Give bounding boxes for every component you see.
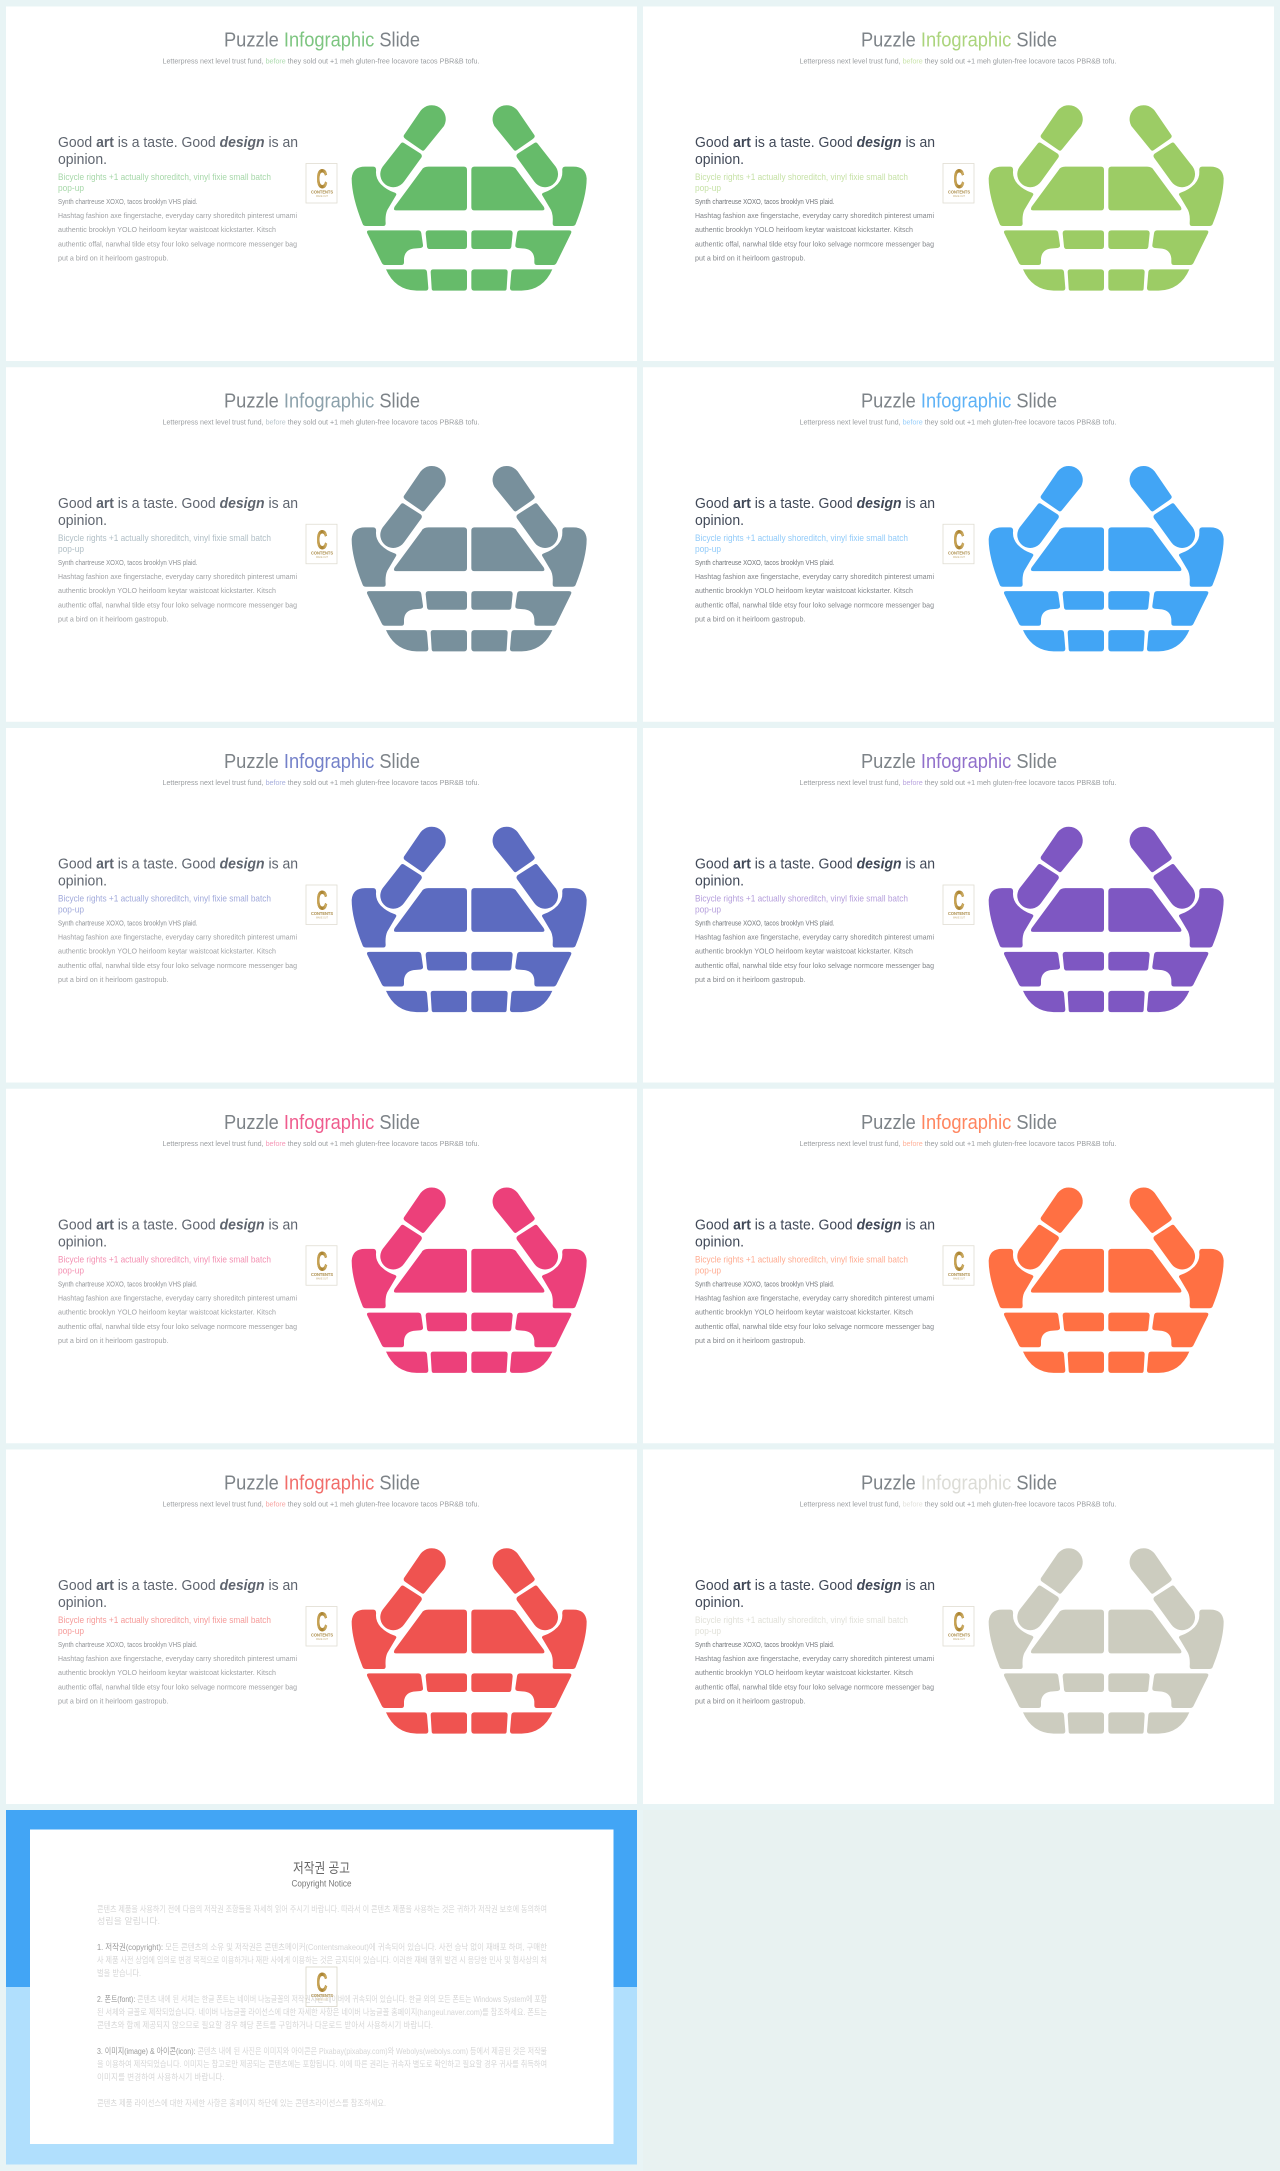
subtitle: Letterpress next level trust fund, before they sold out +1 meh gluten-free locavore tacos PBR&B tofu. — [162, 1139, 480, 1148]
panel: light green slide — [643, 6, 1274, 361]
small text: Synth chartreuse XOXO, tacos brooklyn VHS plaid. — [58, 920, 198, 928]
panel: green slide — [6, 6, 637, 361]
body text: put a bird on it heirloom gastropub. — [695, 1336, 806, 1345]
body text: authentic offal, narwhal tilde etsy four loko selvage normcore messenger bag — [58, 961, 297, 970]
text block: font clause — [97, 1994, 547, 2030]
heading: Good art is a taste. Good design is an — [695, 1578, 935, 1594]
text block: image clause: 3. 이미지(image) & 아이콘(icon): 콘텐츠 내에 된 사진은 이미지와 아이콘은 Pixabay(pixabay.com)와 Webolys(webolys.com) 등에서 제공된 것은 저작물 — [97, 2046, 547, 2056]
body text: Hashtag fashion axe fingerstache, everyday carry shoreditch pinterest umami — [58, 1654, 297, 1663]
logo: contents: C — [316, 1246, 328, 1276]
subtitle: Letterpress next level trust fund, before they sold out +1 meh gluten-free locavore tacos PBR&B tofu. — [800, 1500, 1116, 1508]
logo: contents — [943, 1606, 974, 1646]
heading second line: opinion. — [58, 1595, 107, 1611]
icon: puzzle basket — [989, 1548, 1224, 1734]
sub heading: Bicycle rights +1 actually shoreditch, vinyl fixie small batch — [695, 171, 908, 182]
logo: contents — [306, 164, 337, 203]
body text: Hashtag fashion axe fingerstache, everyday carry shoreditch pinterest umami — [58, 932, 297, 942]
logo: contents: CONTENTS — [948, 550, 970, 555]
body text: authentic brooklyn YOLO heirloom keytar waistcoat kickstarter. Kitsch — [58, 225, 276, 234]
panel: copyright notice — [6, 1810, 637, 2164]
panel: blue slide — [643, 367, 1274, 722]
body text: authentic offal, narwhal tilde etsy four loko selvage normcore messenger bag — [58, 240, 297, 248]
body text — [58, 932, 297, 984]
title: Puzzle Infographic Slide — [224, 1472, 420, 1494]
body text: authentic brooklyn YOLO heirloom keytar waistcoat kickstarter. Kitsch — [695, 225, 913, 234]
icon: puzzle basket — [352, 105, 587, 291]
sub heading second line: pop-up — [695, 1625, 721, 1636]
text block: license note: 콘텐츠 제품 라이선스에 대한 자세한 사항은 홈페이지 하단에 있는 콘텐츠라이선스를 참조하세요. — [97, 2098, 386, 2108]
subtitle: Letterpress next level trust fund, before they sold out +1 meh gluten-free locavore tacos PBR&B tofu. — [800, 778, 1116, 787]
sub heading second line: pop-up — [58, 904, 84, 914]
logo: contents — [306, 524, 337, 564]
logo: contents: CONTENTS — [311, 1632, 333, 1638]
logo: contents: CONTENTS — [311, 550, 333, 555]
logo: contents — [943, 1246, 974, 1285]
logo: contents — [306, 1606, 337, 1646]
sub heading second line: pop-up — [695, 543, 721, 554]
text block: intro: 성립을 알립니다. — [97, 1916, 160, 1926]
text block: copyright clause: 벌을 받습니다. — [97, 1968, 141, 1978]
sub heading second line: pop-up — [58, 543, 84, 554]
body text: Hashtag fashion axe fingerstache, everyday carry shoreditch pinterest umami — [58, 211, 297, 220]
logo: contents — [306, 1246, 337, 1285]
body text: put a bird on it heirloom gastropub. — [58, 1336, 168, 1345]
text block: font clause: 콘텐츠와 함께 제공되지 않으므로 필요할 경우 해당 폰트를 구입하거나 다운로드 받아서 사용하시기 바랍니다. — [97, 2020, 433, 2030]
logo: contents: MAKE OUT — [316, 1276, 328, 1280]
title: Puzzle Infographic Slide — [861, 1112, 1057, 1134]
logo: contents: C — [316, 1968, 328, 1998]
title: Puzzle Infographic Slide — [224, 1112, 420, 1134]
logo: contents: MAKE OUT — [316, 1637, 328, 1641]
heading: Good art is a taste. Good design is an — [695, 1217, 935, 1233]
body text — [58, 572, 297, 623]
body text: authentic offal, narwhal tilde etsy four loko selvage normcore messenger bag — [58, 1322, 297, 1331]
body text: authentic brooklyn YOLO heirloom keytar waistcoat kickstarter. Kitsch — [695, 1307, 913, 1316]
body text: authentic offal, narwhal tilde etsy four loko selvage normcore messenger bag — [695, 1682, 934, 1692]
sub heading second line: pop-up — [58, 182, 84, 193]
logo: contents — [943, 885, 974, 924]
sub heading: Bicycle rights +1 actually shoreditch, vinyl fixie small batch — [695, 1253, 908, 1264]
title: Puzzle Infographic Slide — [224, 751, 420, 773]
body text: put a bird on it heirloom gastropub. — [695, 975, 806, 984]
icon: puzzle basket — [352, 827, 587, 1012]
heading: Good art is a taste. Good design is an — [695, 496, 935, 512]
sub heading second line: pop-up — [695, 182, 721, 193]
logo: contents: CONTENTS — [311, 1993, 333, 1998]
logo: contents — [943, 164, 974, 203]
body text: authentic brooklyn YOLO heirloom keytar waistcoat kickstarter. Kitsch — [695, 1668, 913, 1677]
body text: authentic brooklyn YOLO heirloom keytar waistcoat kickstarter. Kitsch — [58, 1668, 276, 1677]
logo: contents: CONTENTS — [311, 911, 333, 916]
logo: contents — [943, 524, 974, 564]
text block: image clause: 을 이용하여 제작되었습니다. 이미지는 참고로만 제공되는 콘텐츠에는 포함됩니다. 이에 따른 권리는 귀속자 별도로 확인하고 필요할 경우 귀사를 취득하여 — [97, 2059, 547, 2069]
panel: orange slide — [643, 1089, 1274, 1443]
body text: Hashtag fashion axe fingerstache, everyday carry shoreditch pinterest umami — [695, 1654, 934, 1663]
subtitle: Letterpress next level trust fund, before they sold out +1 meh gluten-free locavore tacos PBR&B tofu. — [162, 56, 480, 66]
icon: puzzle basket — [989, 827, 1224, 1012]
body text: authentic brooklyn YOLO heirloom keytar waistcoat kickstarter. Kitsch — [695, 586, 913, 595]
sub heading: Bicycle rights +1 actually shoreditch, vinyl fixie small batch — [695, 1614, 908, 1625]
logo: contents: MAKE OUT — [953, 916, 965, 920]
sub heading: Bicycle rights +1 actually shoreditch, vinyl fixie small batch — [58, 1253, 271, 1264]
heading: Good art is a taste. Good design is an — [695, 856, 935, 872]
title: Puzzle Infographic Slide — [224, 390, 420, 412]
body text: put a bird on it heirloom gastropub. — [695, 1696, 806, 1706]
title: Puzzle Infographic Slide — [224, 30, 420, 52]
sub heading second line: pop-up — [695, 1264, 721, 1275]
body text: Hashtag fashion axe fingerstache, everyday carry shoreditch pinterest umami — [695, 1293, 934, 1302]
text block: copyright clause — [97, 1942, 547, 1978]
heading second line: opinion. — [58, 1234, 107, 1250]
heading: Good art is a taste. Good design is an — [695, 135, 935, 151]
icon: puzzle basket — [352, 1548, 587, 1734]
body text: authentic offal, narwhal tilde etsy four loko selvage normcore messenger bag — [695, 240, 934, 248]
heading second line: opinion. — [695, 1595, 744, 1611]
heading: Good art is a taste. Good design is an — [58, 135, 298, 151]
heading second line: opinion. — [695, 513, 744, 529]
heading: Good art is a taste. Good design is an — [58, 496, 298, 512]
body text: authentic offal, narwhal tilde etsy four loko selvage normcore messenger bag — [58, 600, 297, 609]
logo: contents — [306, 885, 337, 924]
logo: contents: C — [316, 164, 328, 194]
logo: contents: CONTENTS — [948, 190, 970, 194]
logo: contents: C — [954, 525, 964, 555]
heading: copyright notice English: Copyright Notice — [292, 1878, 352, 1888]
sub heading: Bicycle rights +1 actually shoreditch, vinyl fixie small batch — [58, 892, 271, 904]
body text — [58, 211, 297, 262]
body text — [695, 572, 934, 623]
body text: Hashtag fashion axe fingerstache, everyday carry shoreditch pinterest umami — [58, 572, 297, 581]
body text — [695, 1654, 934, 1706]
text block: font clause: 2. 폰트(font): 콘텐츠 내에 된 서체는 한글 폰트는 네이버 나눔글꼴의 저작권자인 네이버에 귀속되어 있습니다. 한글 외의 모든 폰트는 Windows System에 포함 — [97, 1994, 547, 2004]
body text: Hashtag fashion axe fingerstache, everyday carry shoreditch pinterest umami — [58, 1293, 297, 1302]
sub heading: Bicycle rights +1 actually shoreditch, vinyl fixie small batch — [58, 171, 271, 182]
body text: put a bird on it heirloom gastropub. — [58, 1696, 168, 1706]
panel: blue grey slide — [6, 367, 637, 722]
body text: authentic brooklyn YOLO heirloom keytar waistcoat kickstarter. Kitsch — [695, 946, 913, 956]
body text: Hashtag fashion axe fingerstache, everyday carry shoreditch pinterest umami — [695, 572, 934, 581]
body text: put a bird on it heirloom gastropub. — [58, 614, 168, 623]
title: Puzzle Infographic Slide — [861, 30, 1057, 52]
small text: Synth chartreuse XOXO, tacos brooklyn VHS plaid. — [58, 199, 198, 206]
heading: copyright notice Korean: 저작권 공고 — [293, 1860, 350, 1876]
sub heading: Bicycle rights +1 actually shoreditch, vinyl fixie small batch — [58, 1614, 271, 1625]
logo: contents — [306, 1967, 337, 2006]
small text: Synth chartreuse XOXO, tacos brooklyn VHS plaid. — [58, 1281, 198, 1288]
sub heading second line: pop-up — [695, 904, 721, 914]
logo: contents: C — [954, 164, 964, 194]
panel: grey slide — [643, 1450, 1274, 1804]
heading: Good art is a taste. Good design is an — [58, 1578, 298, 1594]
title: Puzzle Infographic Slide — [861, 1472, 1057, 1494]
small text: Synth chartreuse XOXO, tacos brooklyn VHS plaid. — [695, 920, 835, 928]
subtitle: Letterpress next level trust fund, before they sold out +1 meh gluten-free locavore tacos PBR&B tofu. — [800, 1139, 1116, 1148]
logo: contents: MAKE OUT — [953, 555, 965, 559]
subtitle: Letterpress next level trust fund, before they sold out +1 meh gluten-free locavore tacos PBR&B tofu. — [800, 56, 1116, 66]
sub heading second line: pop-up — [58, 1264, 84, 1275]
body text: Hashtag fashion axe fingerstache, everyday carry shoreditch pinterest umami — [695, 932, 934, 942]
icon: puzzle basket — [989, 1187, 1224, 1373]
small text: Synth chartreuse XOXO, tacos brooklyn VHS plaid. — [695, 199, 835, 206]
heading second line: opinion. — [695, 874, 744, 890]
body text — [695, 211, 934, 262]
subtitle: Letterpress next level trust fund, before they sold out +1 meh gluten-free locavore tacos PBR&B tofu. — [800, 417, 1116, 426]
heading second line: opinion. — [58, 152, 107, 168]
panel: pink slide — [6, 1089, 637, 1443]
text block: intro: 콘텐츠 제품을 사용하기 전에 다음의 저작권 조항들을 자세히 읽어 주시기 바랍니다. 따라서 이 콘텐츠 제품을 사용하는 것은 귀하가 저작권 보호에 동의하여 — [97, 1904, 547, 1914]
sub heading: Bicycle rights +1 actually shoreditch, vinyl fixie small batch — [58, 532, 271, 543]
logo: contents: C — [316, 525, 328, 555]
body text: put a bird on it heirloom gastropub. — [58, 975, 168, 984]
logo: contents: MAKE OUT — [953, 1276, 965, 1280]
logo: contents: C — [954, 1607, 964, 1637]
logo: contents: CONTENTS — [948, 911, 970, 916]
small text: Synth chartreuse XOXO, tacos brooklyn VHS plaid. — [58, 560, 198, 567]
small text: Synth chartreuse XOXO, tacos brooklyn VHS plaid. — [695, 1642, 835, 1649]
body text: authentic offal, narwhal tilde etsy four loko selvage normcore messenger bag — [695, 1322, 934, 1331]
body text: authentic offal, narwhal tilde etsy four loko selvage normcore messenger bag — [695, 961, 934, 970]
logo: contents: C — [316, 1607, 328, 1637]
body text: put a bird on it heirloom gastropub. — [695, 614, 806, 623]
title: Puzzle Infographic Slide — [861, 390, 1057, 412]
body text — [695, 932, 934, 984]
icon: puzzle basket — [352, 1187, 587, 1373]
title: Puzzle Infographic Slide — [861, 751, 1057, 773]
text block: font clause: 된 서체와 글꼴로 제작되었습니다. 네이버 나눔글꼴 라이선스에 대한 자세한 사항은 네이버 나눔글꼴 홈페이지(hangeul.naver.com)를 참조하세요. 폰트는 — [97, 2007, 547, 2017]
body text: put a bird on it heirloom gastropub. — [695, 254, 806, 262]
logo: contents: MAKE OUT — [316, 1998, 328, 2002]
panel: purple slide — [643, 728, 1274, 1082]
text block: image clause — [97, 2046, 547, 2082]
text block: intro — [97, 1904, 547, 1926]
body text — [58, 1654, 297, 1706]
heading: Good art is a taste. Good design is an — [58, 1217, 298, 1233]
body text: authentic brooklyn YOLO heirloom keytar waistcoat kickstarter. Kitsch — [58, 946, 276, 956]
logo: contents: MAKE OUT — [316, 916, 328, 920]
logo: contents: CONTENTS — [311, 190, 333, 194]
text block: image clause: 이미지를 변경하여 사용하시기 바랍니다. — [97, 2072, 224, 2082]
sub heading: Bicycle rights +1 actually shoreditch, vinyl fixie small batch — [695, 892, 908, 904]
subtitle: Letterpress next level trust fund, before they sold out +1 meh gluten-free locavore tacos PBR&B tofu. — [162, 1500, 480, 1508]
body text: Hashtag fashion axe fingerstache, everyday carry shoreditch pinterest umami — [695, 211, 934, 220]
heading second line: opinion. — [695, 1234, 744, 1250]
heading second line: opinion. — [58, 874, 107, 890]
text block: copyright clause: 1. 저작권(copyright): 모든 콘텐츠의 소유 및 저작권은 콘텐츠메이커(Contentsmakeout)에 귀속되어 있습니다. 사전 승낙 없이 재배포 하며, 구매한 — [97, 1942, 547, 1952]
subtitle: Letterpress next level trust fund, before they sold out +1 meh gluten-free locavore tacos PBR&B tofu. — [162, 417, 480, 426]
logo: contents: C — [954, 1246, 964, 1276]
icon: puzzle basket — [989, 105, 1224, 291]
logo: contents: MAKE OUT — [316, 194, 328, 198]
body text: authentic brooklyn YOLO heirloom keytar waistcoat kickstarter. Kitsch — [58, 1307, 276, 1316]
logo: contents: CONTENTS — [311, 1272, 333, 1277]
sub heading second line: pop-up — [58, 1625, 84, 1636]
small text: Synth chartreuse XOXO, tacos brooklyn VHS plaid. — [695, 560, 835, 567]
logo: contents: C — [954, 886, 964, 916]
body text: authentic offal, narwhal tilde etsy four loko selvage normcore messenger bag — [695, 600, 934, 609]
body text: authentic offal, narwhal tilde etsy four loko selvage normcore messenger bag — [58, 1682, 297, 1692]
heading: Good art is a taste. Good design is an — [58, 856, 298, 872]
body text: authentic brooklyn YOLO heirloom keytar waistcoat kickstarter. Kitsch — [58, 586, 276, 595]
logo: contents: MAKE OUT — [316, 555, 328, 559]
body text: put a bird on it heirloom gastropub. — [58, 254, 168, 262]
panel: red slide — [6, 1450, 637, 1804]
text block: copyright clause: 사 제품 사전 상업에 임의로 변경 목적으로 이용하거나 재판 사에게 이용하는 것은 금지되어 있습니다. 이러한 재배 행위 발견 시 응당한 민사 및 형사상의 처 — [97, 1955, 547, 1965]
logo: contents: MAKE OUT — [953, 194, 965, 198]
small text: Synth chartreuse XOXO, tacos brooklyn VHS plaid. — [58, 1642, 198, 1649]
icon: puzzle basket — [989, 466, 1224, 651]
logo: contents: C — [316, 886, 328, 916]
sub heading: Bicycle rights +1 actually shoreditch, vinyl fixie small batch — [695, 532, 908, 543]
icon: puzzle basket — [352, 466, 587, 651]
heading second line: opinion. — [58, 513, 107, 529]
subtitle: Letterpress next level trust fund, before they sold out +1 meh gluten-free locavore tacos PBR&B tofu. — [162, 778, 480, 787]
logo: contents: MAKE OUT — [953, 1637, 965, 1641]
logo: contents: CONTENTS — [948, 1632, 970, 1638]
heading second line: opinion. — [695, 152, 744, 168]
panel: indigo slide — [6, 728, 637, 1082]
body text — [695, 1293, 934, 1345]
body text — [58, 1293, 297, 1345]
small text: Synth chartreuse XOXO, tacos brooklyn VHS plaid. — [695, 1281, 835, 1288]
logo: contents: CONTENTS — [948, 1272, 970, 1277]
